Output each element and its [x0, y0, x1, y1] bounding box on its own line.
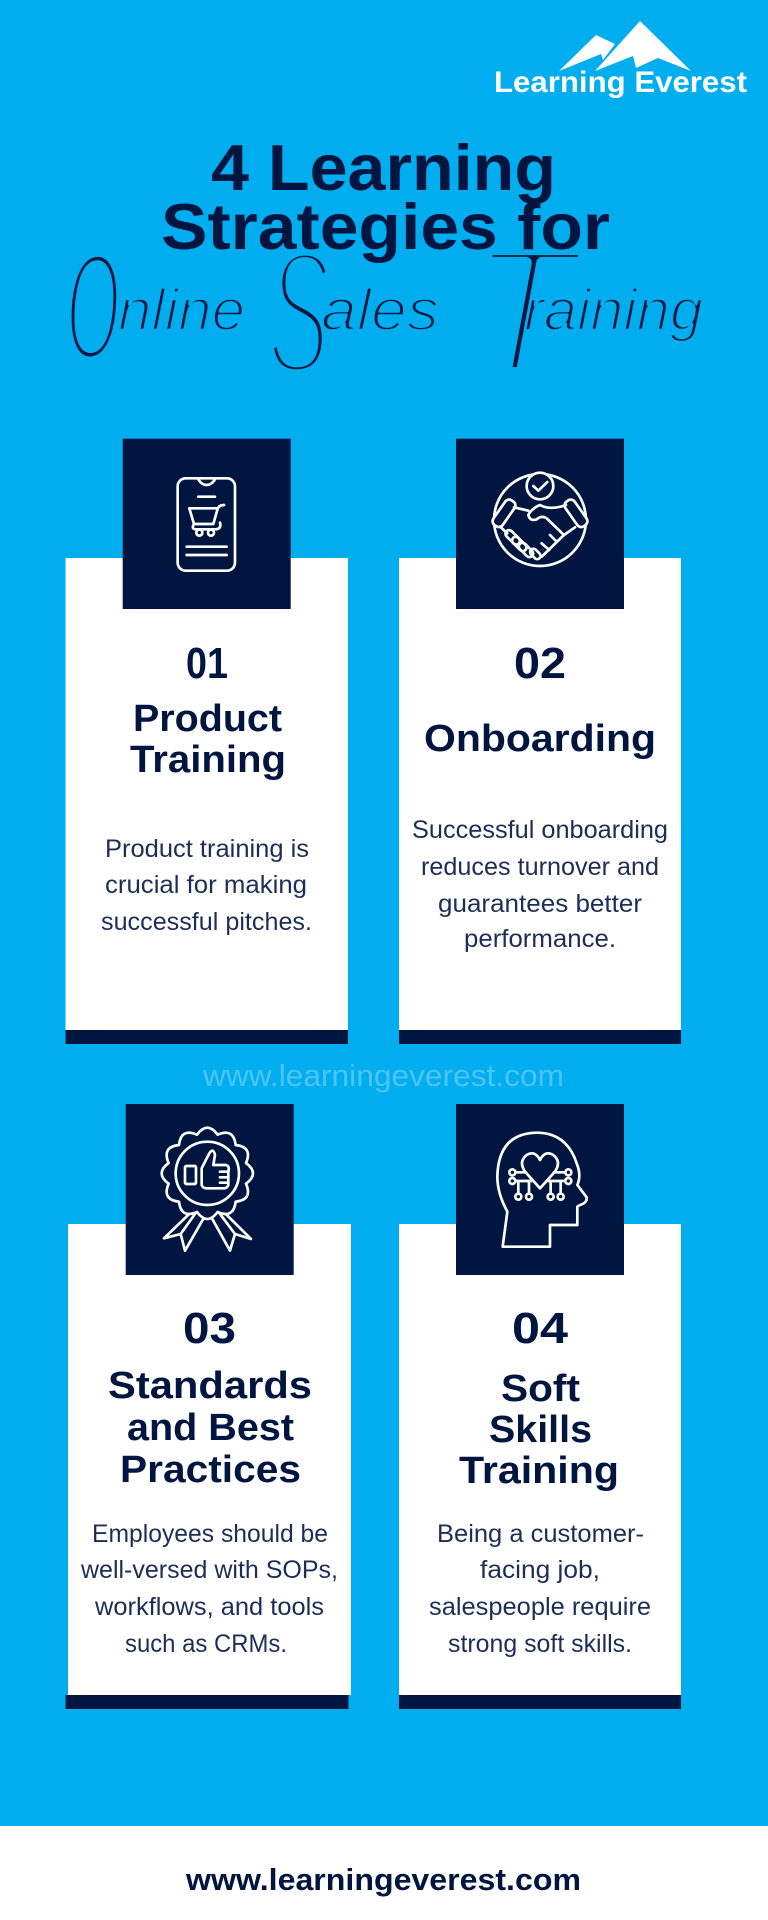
card body text: well-versed with SOPs,: [80, 1556, 338, 1584]
card bottom bar: [399, 1030, 681, 1044]
card body text: Being a customer-: [437, 1520, 644, 1548]
card background: [399, 558, 681, 1030]
script subtitle: Online Sales Training: ales: [321, 278, 439, 343]
card body text: successful pitches.: [101, 908, 312, 936]
heading line two: Strategies for: [161, 190, 610, 263]
card body text: performance.: [464, 925, 616, 953]
panel: card 01 Product Training: [66, 439, 348, 1044]
script subtitle: Online Sales Training: O: [66, 222, 120, 392]
card bottom bar: [399, 1695, 681, 1709]
footer url: www.learningeverest.com: [185, 1862, 581, 1897]
logo: Learning Everest: [494, 21, 747, 99]
panel: card 02 Onboarding: [399, 439, 681, 1044]
card background: [66, 558, 348, 1030]
footer background: [0, 1826, 768, 1920]
card heading: [108, 1365, 312, 1491]
card bottom bar: [66, 1030, 348, 1044]
title: [66, 131, 703, 412]
panel: card 04 Soft Skills Training: [399, 1104, 681, 1709]
card body text: [429, 1520, 651, 1658]
icon tile: [456, 439, 624, 609]
icon: mountain peaks: [559, 21, 691, 71]
card heading: Practices: [120, 1449, 301, 1491]
script subtitle: Online Sales Training: nline: [118, 278, 245, 343]
card heading: [130, 698, 286, 781]
card body text: facing job,: [480, 1556, 600, 1584]
number: 03: [183, 1304, 236, 1353]
card heading: Onboarding: [424, 718, 656, 760]
card body text: workflows, and tools: [94, 1593, 324, 1621]
card body text: crucial for making: [105, 871, 307, 899]
logo wordmark: Learning Everest: [494, 66, 747, 99]
icon: handshake in circle: [491, 473, 589, 566]
card body text: Successful onboarding: [412, 816, 668, 844]
script subtitle: Online Sales Training: S: [268, 215, 330, 411]
card background: [68, 1224, 351, 1695]
card body text: strong soft skills.: [448, 1630, 632, 1658]
card heading: Standards: [108, 1365, 312, 1407]
card body text: [412, 816, 668, 953]
icon tile: [126, 1104, 294, 1275]
card background: [399, 1224, 681, 1695]
card body text: salespeople require: [429, 1593, 651, 1621]
panel: card 03 Standards and Best Practices: [66, 1104, 351, 1709]
footer band: [0, 1826, 768, 1920]
card body text: [101, 835, 312, 936]
card heading: Training: [130, 739, 286, 781]
card body text: such as CRMs.: [125, 1630, 287, 1658]
icon: award rosette with thumbs up: [162, 1128, 253, 1251]
card bottom bar: [66, 1695, 348, 1709]
watermark url: www.learningeverest.com: [202, 1058, 564, 1093]
card body text: Employees should be: [92, 1520, 328, 1548]
card heading: Training: [459, 1450, 619, 1492]
card heading: Product: [133, 698, 282, 740]
icon tile: [123, 439, 291, 609]
script subtitle: Online Sales Training: raining: [524, 278, 703, 343]
icon: phone with shopping cart: [178, 478, 235, 571]
card body text: [80, 1520, 338, 1658]
script subtitle: Online Sales Training: [66, 211, 703, 412]
card heading: Soft: [501, 1368, 580, 1410]
card body text: guarantees better: [438, 890, 642, 918]
icon: head with heart circuit: [497, 1133, 587, 1247]
card heading: [459, 1368, 619, 1492]
icon tile: [456, 1104, 624, 1275]
number: 01: [186, 639, 228, 688]
number: 02: [514, 639, 566, 688]
card heading: Skills: [489, 1409, 592, 1451]
card body text: Product training is: [105, 835, 309, 863]
script subtitle: Online Sales Training: T: [470, 211, 586, 412]
card body text: reduces turnover and: [421, 853, 659, 881]
heading line one: 4 Learning: [211, 131, 556, 204]
card heading: and Best: [127, 1407, 294, 1449]
number: 04: [512, 1304, 569, 1353]
